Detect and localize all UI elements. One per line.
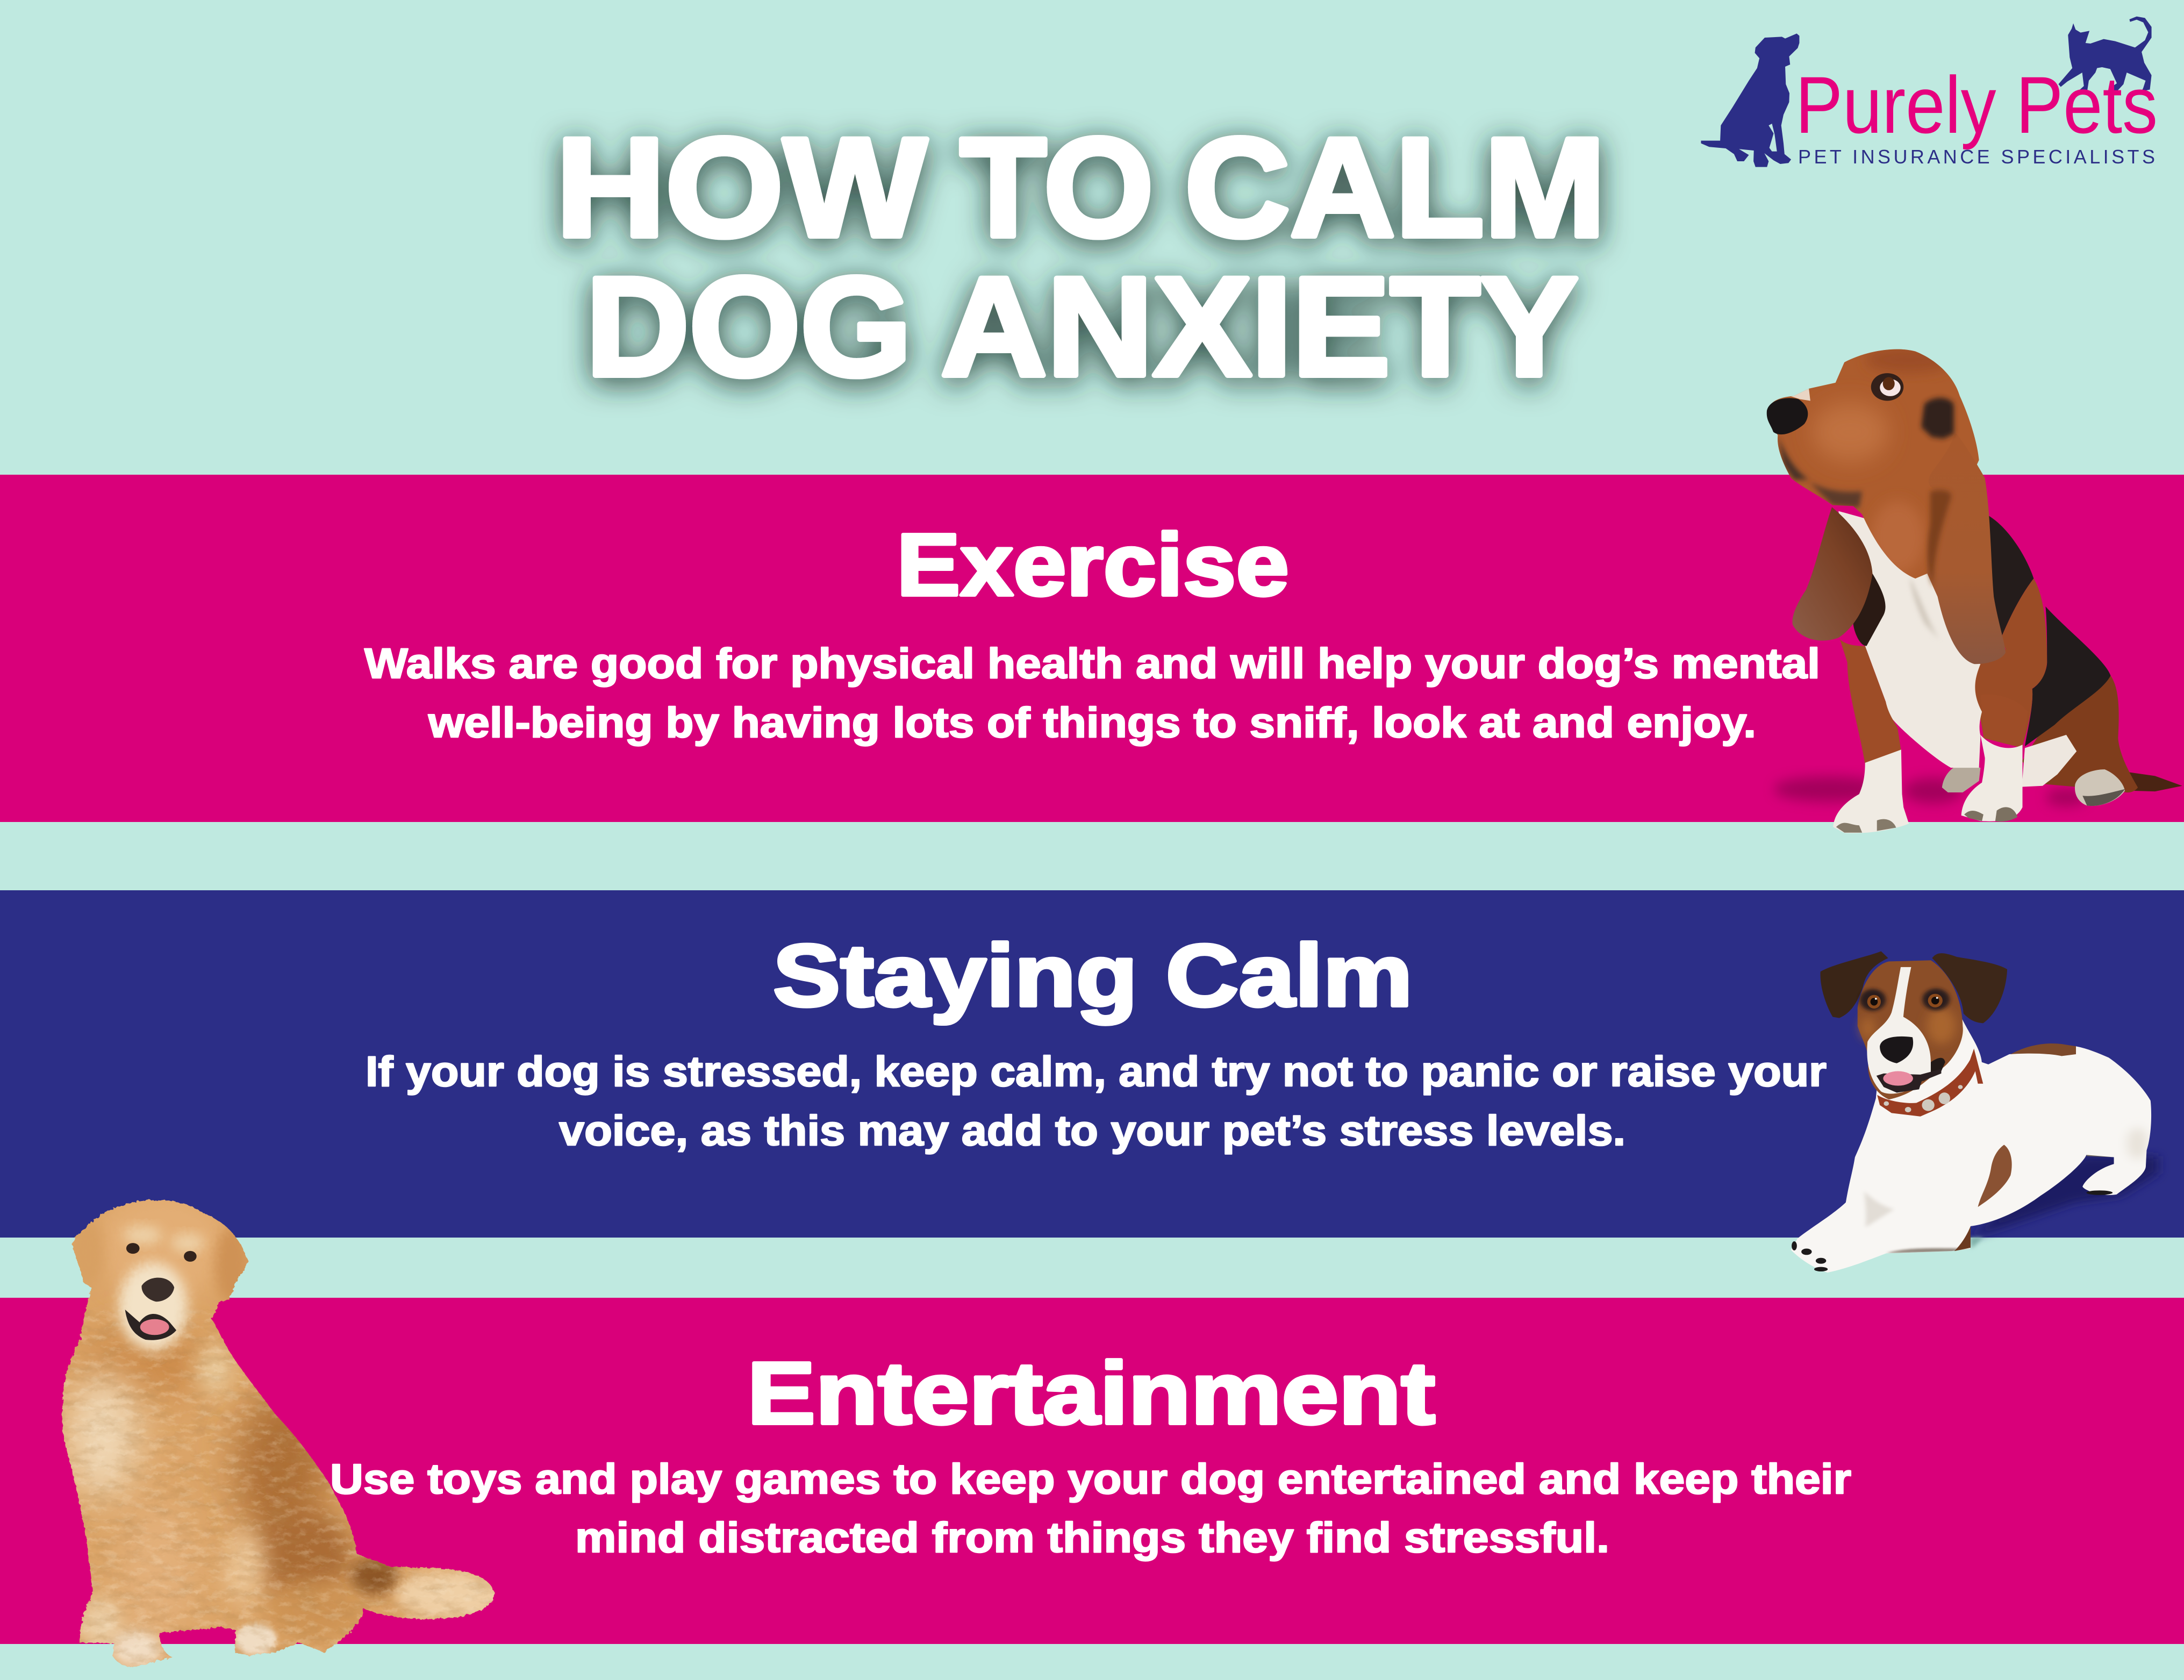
panel: exercise band: [0, 475, 2184, 822]
ear left: [1820, 951, 1888, 1018]
black behind ear: [1853, 574, 1886, 646]
body soft shading: [1864, 1128, 2148, 1253]
mouth: [1877, 1069, 1941, 1093]
head: [96, 1192, 228, 1300]
heading: exercise: Exercise: [897, 516, 1289, 614]
back patch: [2010, 1043, 2076, 1056]
text: staying calm body: If your dog is stressed, keep calm, and try not to panic or raise your: [366, 1047, 1827, 1095]
text: entertainment body: mind distracted from things they find stressful.: [575, 1513, 1609, 1561]
belly: [2022, 735, 2076, 787]
sock and paw right: [1961, 735, 2023, 821]
left paw toes: [1836, 819, 1896, 833]
shadow on teal: [1970, 1238, 1983, 1249]
front legs: [118, 1500, 197, 1640]
chest shading: [1909, 577, 1939, 639]
logo tagline: PET INSURANCE SPECIALISTS: [1798, 146, 2155, 168]
heading: entertainment: Entertainment: [747, 1344, 1435, 1442]
tongue: [1883, 1071, 1913, 1085]
dog: basset hound: [1767, 346, 2182, 833]
hind paw: [2075, 769, 2125, 806]
jaw shadow: [1778, 435, 1809, 480]
eye: [1871, 373, 1903, 401]
neck ruff: [76, 1332, 215, 1395]
tail: [2125, 771, 2182, 791]
title: CALM: [1185, 109, 1606, 266]
side patch: [1978, 1145, 2012, 1207]
collar studs: [1884, 1085, 1963, 1112]
chest: [67, 1373, 140, 1500]
head: [1858, 960, 1963, 1099]
tail: [350, 1557, 399, 1595]
tongue: [140, 1319, 169, 1335]
left ear: [1792, 507, 1872, 641]
chest: [1838, 511, 1982, 768]
collar: [1877, 1048, 1983, 1117]
nose: [1880, 1036, 1913, 1063]
text: exercise body: well-being by having lots of things to sniff, look at and enjoy.: [428, 698, 1756, 746]
elbow: [1954, 1226, 1971, 1251]
text: exercise body: Walks are good for physical health and will help your dog’s mental: [364, 639, 1820, 687]
body shadow: [1970, 1156, 2158, 1238]
hind paw shading: [2082, 789, 2125, 806]
title: ANXIETY: [941, 248, 1578, 405]
shoulder: [1973, 578, 2047, 748]
rear black saddle: [2025, 606, 2111, 746]
title: DOG: [586, 248, 912, 405]
nose: [141, 1278, 174, 1302]
head shading: [1778, 346, 1954, 574]
shoulder black patch: [1974, 514, 2033, 638]
icon: cat silhouette: [2058, 17, 2152, 91]
right paw toes: [1964, 807, 2017, 821]
title: HOW: [556, 109, 928, 266]
heading: staying calm: Staying Calm: [773, 926, 1413, 1025]
text: exercise body: [364, 639, 1820, 746]
cheek shadow: [1809, 481, 1862, 507]
sock and paw left: [1833, 749, 1909, 833]
fur base: [43, 1183, 516, 1680]
logo: Purely Pets: [1701, 17, 2158, 168]
ear right: [1932, 953, 2007, 1023]
haunch: [245, 1510, 354, 1598]
body: [1791, 1019, 2151, 1272]
fur texture: [43, 1310, 516, 1680]
panel: staying calm band: [0, 890, 2184, 1238]
dark jowl: [1923, 1058, 1945, 1081]
icon: dog silhouette: [1701, 33, 1799, 167]
lower haunch: [266, 1582, 363, 1640]
dog: jack russell: [1791, 951, 2158, 1272]
eyes: [1860, 989, 1950, 1011]
front leg right: [1980, 694, 2028, 748]
white nose bridge: [1789, 389, 1810, 401]
panel: entertainment band: [0, 1298, 2184, 1644]
ear fold: [1928, 490, 1951, 587]
muzzle: [118, 1262, 188, 1351]
dog: golden retriever: [43, 1183, 516, 1680]
muzzle and blaze: [1867, 967, 1931, 1093]
text: entertainment body: Use toys and play games to keep your dog entertained and keep their: [330, 1455, 1851, 1503]
eyes: [126, 1243, 197, 1262]
front leg left: [1840, 639, 1901, 764]
text: staying calm body: [366, 1047, 1827, 1154]
hind paw: [234, 1624, 277, 1655]
front toes: [1792, 1190, 2113, 1271]
text: staying calm body: voice, as this may add to your pet’s stress levels.: [559, 1106, 1626, 1154]
back shading: [236, 1392, 327, 1545]
underside: [2086, 1134, 2113, 1157]
text: entertainment body: [330, 1455, 1851, 1561]
brow patch: [1921, 398, 1954, 439]
title: TO: [960, 109, 1154, 266]
right ear: [1927, 432, 2006, 664]
cheek highlights: [1861, 1008, 1956, 1044]
nose: [1767, 398, 1808, 434]
mouth: [125, 1310, 176, 1340]
head: [1767, 349, 1979, 578]
ground shadow: [1773, 777, 2087, 806]
hind leg: [2022, 676, 2138, 792]
back paw: [1942, 764, 1980, 792]
title: [556, 109, 1606, 405]
